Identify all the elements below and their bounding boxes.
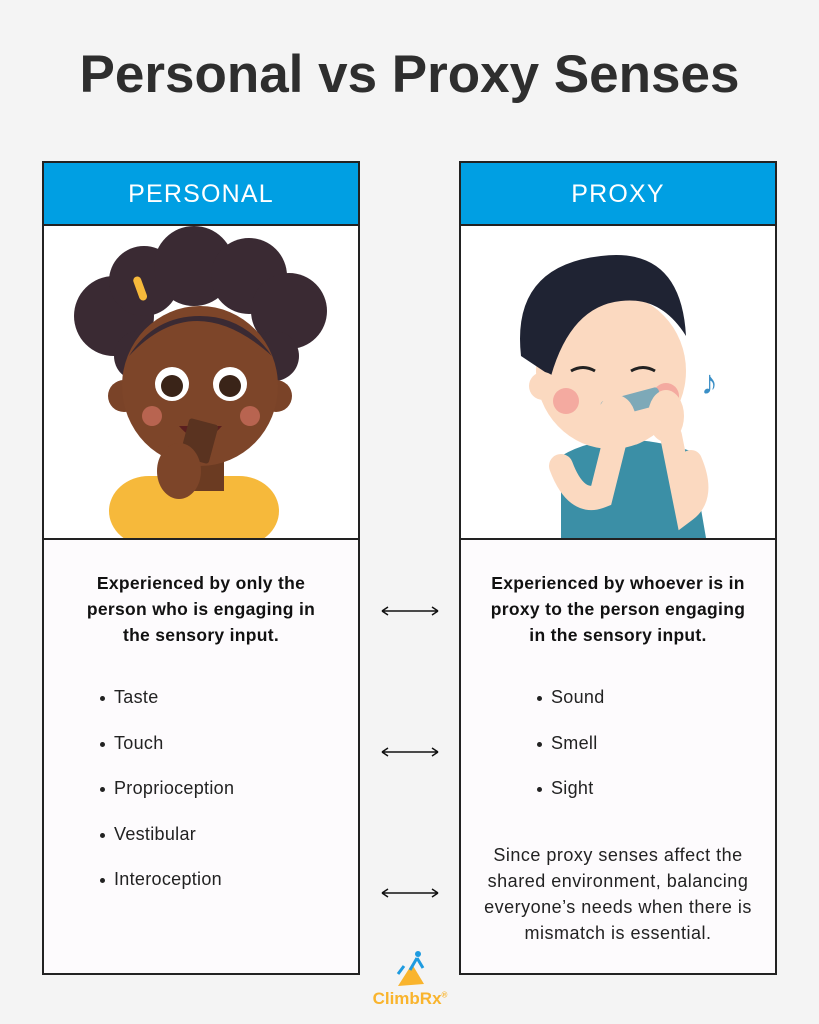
text: proxy description bbox=[491, 573, 745, 645]
list: proxy senses: Smell bbox=[551, 732, 598, 752]
text: proxy note: Since proxy senses affect the bbox=[493, 845, 743, 865]
list: proxy senses: Sound bbox=[551, 687, 605, 707]
illustration: girl eating chocolate bbox=[44, 226, 358, 540]
list: personal senses: Interoception bbox=[114, 869, 222, 889]
panel: personal bbox=[42, 161, 360, 975]
list: proxy senses: Sight bbox=[551, 778, 594, 798]
text: proxy note bbox=[484, 845, 752, 943]
text: proxy note: everyone’s needs when there is bbox=[484, 897, 752, 917]
logo: ClimbRx bbox=[373, 951, 448, 1008]
illustration: boy playing harmonica: ♪ bbox=[701, 364, 718, 402]
header: personal: PERSONAL bbox=[128, 180, 274, 208]
list: proxy senses bbox=[537, 687, 605, 798]
title: Personal vs Proxy Senses bbox=[80, 45, 739, 104]
text: proxy note: mismatch is essential. bbox=[524, 923, 712, 943]
text: personal description: Experienced by only the bbox=[97, 573, 305, 593]
arrow 2 bbox=[382, 747, 438, 757]
text: proxy description: in the sensory input. bbox=[529, 625, 707, 645]
panel: proxy bbox=[459, 161, 777, 975]
arrow 1 bbox=[382, 606, 438, 616]
arrow 3 bbox=[382, 888, 438, 898]
text: proxy description: Experienced by whoever is in bbox=[491, 573, 745, 593]
list: personal senses bbox=[100, 687, 234, 889]
header: proxy bbox=[461, 163, 775, 226]
text: proxy description: proxy to the person engaging bbox=[491, 599, 745, 619]
header: proxy: PROXY bbox=[571, 180, 665, 208]
illustration: boy playing harmonica bbox=[461, 226, 775, 540]
list: personal senses: Vestibular bbox=[114, 824, 196, 844]
text: personal description: the sensory input. bbox=[123, 625, 279, 645]
list: personal senses: Taste bbox=[114, 687, 159, 707]
text: personal description: person who is engaging in bbox=[87, 599, 315, 619]
list: personal senses: Proprioception bbox=[114, 778, 234, 798]
list: personal senses: Touch bbox=[114, 732, 164, 752]
text: proxy note: shared environment, balancing bbox=[488, 871, 748, 891]
text: personal description bbox=[87, 573, 315, 645]
header: personal bbox=[44, 163, 358, 226]
logo: ClimbRx: ClimbRx® bbox=[373, 989, 447, 1008]
